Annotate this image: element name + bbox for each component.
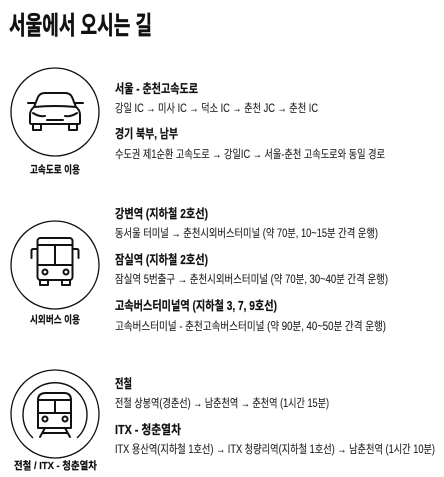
text: Gyeonggi route: 수도권 제1순환 고속도로 → 강일IC → 서울-춘천 고속도로와 동일 경로 [115, 147, 385, 161]
heading: Express bus terminal station: 고속버스터미널역 (지하철 3, 7, 9호선) [115, 299, 277, 313]
panel: car route [11, 68, 385, 176]
text: subway route: 전철 상봉역(경춘선) → 남춘천역 → 춘천역 (1시간 15분) [115, 396, 329, 410]
icon: bus in circle [11, 221, 99, 309]
icon: car in circle [11, 68, 99, 156]
icon: train in circle [11, 370, 99, 458]
panel: bus route [11, 207, 388, 333]
text: expressway route: 강일 IC → 미사 IC → 덕소 IC → 춘천 JC → 춘천 IC [115, 101, 318, 115]
heading: ITX: ITX - 청춘열차 [115, 422, 181, 437]
heading: Jamsil station: 잠실역 (지하철 2호선) [115, 253, 208, 267]
title: 서울에서 오시는 길 [9, 12, 152, 40]
heading: Gangbyeon station: 강변역 (지하철 2호선) [115, 207, 208, 221]
label: subway and ITX: 전철 / ITX - 청춘열차 [14, 459, 97, 472]
panel: train route [11, 370, 435, 472]
text: Express bus terminal route: 고속버스터미널 - 춘천고속버스터미널 (약 90분, 40~50분 간격 운행) [115, 319, 386, 333]
heading: subway: 전철 [115, 377, 132, 391]
heading: Seoul-Chuncheon expressway: 서울 - 춘천고속도로 [115, 82, 198, 96]
heading: Gyeonggi north and south: 경기 북부, 남부 [115, 126, 178, 141]
text: Gangbyeon route: 동서울 터미널 → 춘천시외버스터미널 (약 70분, 10~15분 간격 운행) [115, 226, 378, 240]
label: intercity bus: 시외버스 이용 [30, 313, 80, 326]
label: expressway: 고속도로 이용 [30, 163, 80, 176]
text: Jamsil route: 잠실역 5번출구 → 춘천시외버스터미널 (약 70분, 30~40분 간격 운행) [115, 272, 388, 286]
